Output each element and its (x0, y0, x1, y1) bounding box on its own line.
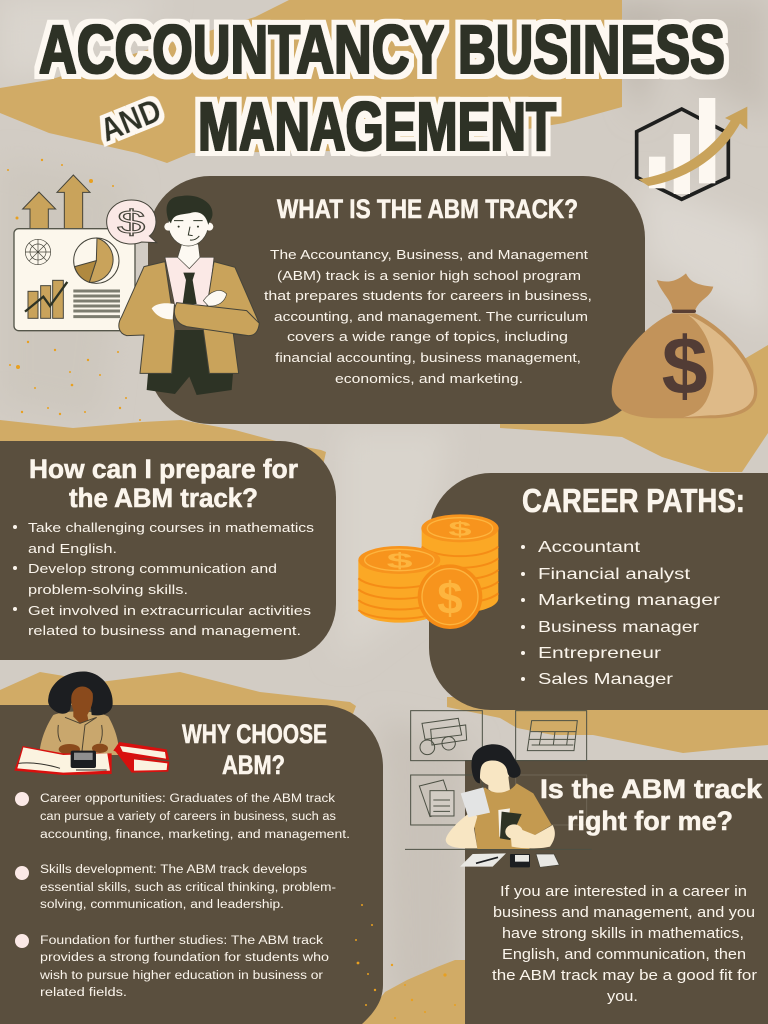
text block: why choose ABM: ABM? (222, 750, 285, 780)
calculator (71, 751, 96, 768)
panel: what is the ABM track (148, 176, 645, 424)
orange speckles (7, 159, 456, 1019)
paper (461, 787, 490, 817)
chart board (14, 229, 135, 331)
reasons list: accounting, finance, marketing, and management. (40, 829, 350, 841)
woman's arms (446, 812, 477, 848)
hands (203, 290, 227, 306)
career list (521, 539, 721, 688)
reasons list: wish to pursue higher education in business or (39, 970, 323, 982)
text stripes (73, 291, 120, 317)
hair (471, 744, 521, 783)
career list: Financial analyst (538, 566, 691, 583)
text block: what is the ABM track (264, 194, 592, 386)
face and neck (71, 687, 93, 723)
paragraph: (ABM) track is a senior high school program (277, 268, 581, 283)
panel: how can I prepare (0, 441, 336, 660)
paragraph: business and management, and you (493, 905, 755, 921)
icon: growth chart hexagon (637, 98, 747, 199)
back coin stack (422, 528, 498, 613)
pie chart (74, 238, 119, 283)
tie (183, 273, 197, 304)
paragraph: financial accounting, business management, (275, 350, 581, 365)
paragraph (492, 884, 757, 1005)
illustration: woman reviewing receipts (405, 711, 592, 867)
career list: Entrepreneur (538, 645, 662, 662)
reasons list: essential skills, such as critical thinking, problem- (40, 882, 336, 894)
woman's hair (48, 672, 113, 715)
red binders (113, 742, 169, 760)
paragraph: have strong skills in mathematics, (502, 926, 744, 942)
folded arm (174, 303, 259, 336)
front coin stack (358, 560, 440, 623)
reasons list: related fields. (40, 987, 127, 999)
large coin (418, 564, 482, 629)
reasons list: can pursue a variety of careers in business, such as (40, 811, 336, 823)
title word: and: AND (95, 92, 166, 148)
icon: money bag (612, 273, 757, 418)
text block: how can I prepare (13, 454, 315, 638)
reasons list: solving, communication, and leadership. (40, 899, 284, 911)
reasons list: provides a strong foundation for students who (40, 952, 329, 964)
face (478, 755, 510, 786)
trousers (147, 330, 233, 395)
hands (59, 744, 80, 755)
title line 2: MANAGEMENT (198, 88, 556, 165)
paragraph: economics, and marketing. (335, 371, 523, 386)
illustration: woman with calculator and binders (14, 672, 169, 775)
paragraph: the ABM track may be a good fit for (492, 968, 757, 984)
face (168, 202, 208, 246)
bullets: problem-solving skills. (28, 582, 188, 597)
text block: why choose ABM (15, 719, 350, 999)
open book (14, 746, 112, 775)
panel: why choose ABM (0, 705, 383, 1024)
paragraph: accounting, and management. The curriculum (274, 309, 588, 324)
speech bubble (107, 200, 157, 244)
bullets: Develop strong communication and (28, 561, 277, 576)
text block: how can I prepare: the ABM track? (69, 483, 258, 513)
neck and collar (178, 244, 200, 269)
text block: is the ABM track right for me: right for me? (567, 806, 733, 836)
illustration: business man with chart board (14, 175, 259, 395)
title (39, 11, 725, 165)
paragraph: that prepares students for careers in business, (264, 288, 592, 303)
cash and coins (422, 718, 467, 745)
bullets (13, 520, 315, 638)
bullets: and English. (28, 541, 117, 556)
growth arrows (23, 175, 90, 230)
paragraph: If you are interested in a career in (500, 884, 747, 900)
reasons list: Skills development: The ABM track develops (40, 864, 307, 876)
heading: Is the ABM track (540, 774, 763, 804)
illustration: gold coins (358, 514, 499, 629)
hand (505, 824, 523, 839)
receipts (419, 780, 453, 817)
shirt (165, 257, 214, 307)
green cash notes (498, 808, 510, 838)
bullets: Get involved in extracurricular activities (28, 603, 312, 618)
panel: is the ABM track right for me (465, 760, 768, 1024)
career list: Sales Manager (538, 671, 674, 688)
paragraph (264, 247, 592, 386)
panel: career paths (429, 473, 768, 710)
paragraph: you. (607, 989, 638, 1005)
career list: Business manager (538, 619, 700, 636)
illustration: gold coins: $ (448, 518, 473, 541)
blouse (39, 711, 119, 755)
calendar (527, 721, 577, 751)
icon frames (405, 711, 592, 849)
bar chart (28, 280, 63, 318)
bullets: related to business and management. (28, 623, 301, 638)
career list: Marketing manager (538, 592, 721, 609)
facial features (174, 221, 203, 240)
heading: How can I prepare for (29, 454, 298, 484)
heading: WHAT IS THE ABM TRACK? (277, 194, 578, 224)
illustration: gold coins: $ (437, 572, 463, 623)
heading: WHY CHOOSE (182, 719, 327, 749)
shirt (468, 783, 552, 849)
illustration: gold coins: $ (387, 549, 413, 573)
paragraph: English, and communication, then (502, 947, 746, 963)
compass (25, 239, 51, 265)
paragraph: covers a wide range of topics, including (287, 329, 568, 344)
text block: career paths (521, 482, 745, 688)
desk items (460, 853, 506, 867)
reasons list: Foundation for further studies: The ABM track (40, 935, 323, 947)
career list: Accountant (538, 539, 641, 556)
illustration: business man with chart board: $ (117, 204, 145, 241)
bullets: Take challenging courses in mathematics (28, 520, 315, 535)
dollar sign: $ (662, 321, 708, 412)
jacket (119, 262, 175, 373)
neck (488, 777, 510, 795)
paragraph: The Accountancy, Business, and Management (270, 247, 588, 262)
hair (167, 195, 212, 225)
text block: is the ABM track right for me (492, 774, 763, 1005)
reasons list: Career opportunities: Graduates of the ABM track (40, 793, 335, 805)
reasons list (15, 792, 350, 999)
